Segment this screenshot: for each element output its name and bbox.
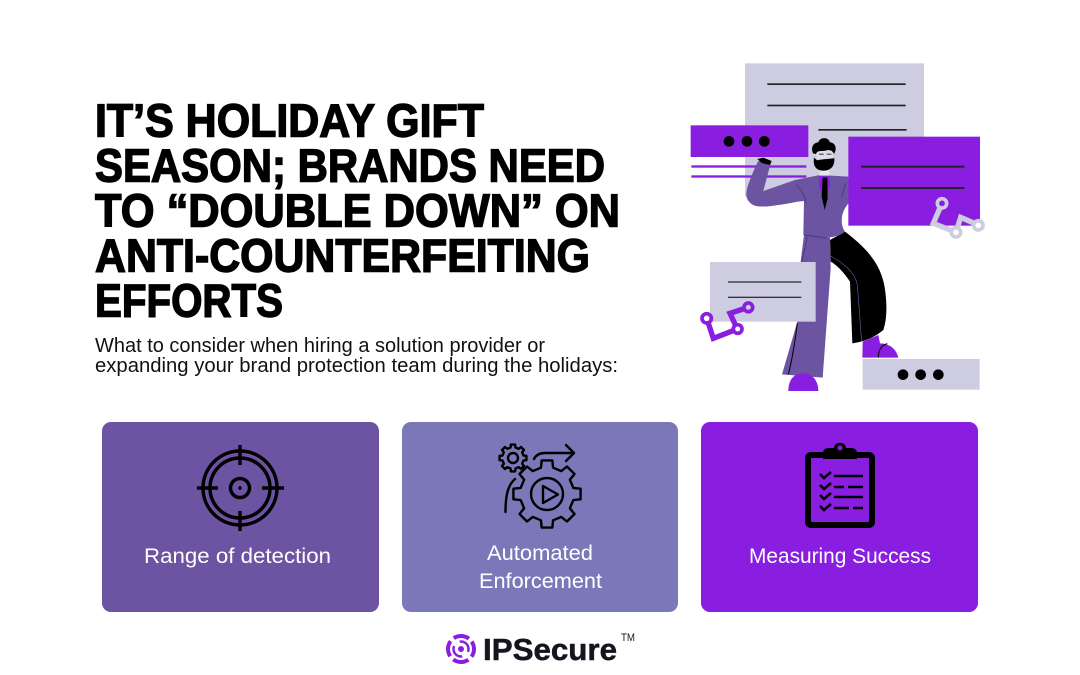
title <box>95 94 620 326</box>
subtitle <box>95 335 618 377</box>
icon: clipboard checklist <box>808 443 872 525</box>
panel: lavender note <box>710 262 816 322</box>
label <box>479 542 602 593</box>
subtitle: expanding your brand protection team during the holidays: <box>95 355 618 377</box>
label: Enforcement <box>479 570 602 593</box>
panel: purple document <box>848 137 980 226</box>
panel: purple dots bar <box>691 125 808 178</box>
title: SEASON; BRANDS NEED <box>95 140 605 192</box>
label: Measuring Success <box>749 545 931 568</box>
title: TO “DOUBLE DOWN” ON <box>95 184 620 236</box>
icon: lavender nodes connector <box>933 199 983 237</box>
label: Range of detection <box>144 545 331 568</box>
icon: purple nodes connector <box>702 303 753 338</box>
logo: IPSecure: TM <box>621 632 635 644</box>
illustration: businessman with interface panels <box>691 63 983 391</box>
icon: logo mark <box>443 631 479 667</box>
panel: lavender dots bar <box>863 359 980 390</box>
title: ANTI-COUNTERFEITING <box>95 230 590 282</box>
logo: IPSecure <box>443 631 635 667</box>
title: EFFORTS <box>95 274 283 326</box>
panel: measuring success <box>701 422 978 612</box>
label: Automated <box>487 542 593 565</box>
logo: IPSecure: IPSecure <box>483 632 617 667</box>
icon: target <box>197 445 284 531</box>
subtitle: What to consider when hiring a solution provider or <box>95 335 545 357</box>
title: IT’S HOLIDAY GIFT <box>95 94 484 146</box>
panel: range of detection <box>102 422 379 612</box>
figure: man in suit <box>746 138 898 391</box>
icon: gears with play and arrow <box>500 445 581 528</box>
panel: large lavender document <box>745 63 924 197</box>
panel: automated enforcement <box>402 422 678 612</box>
